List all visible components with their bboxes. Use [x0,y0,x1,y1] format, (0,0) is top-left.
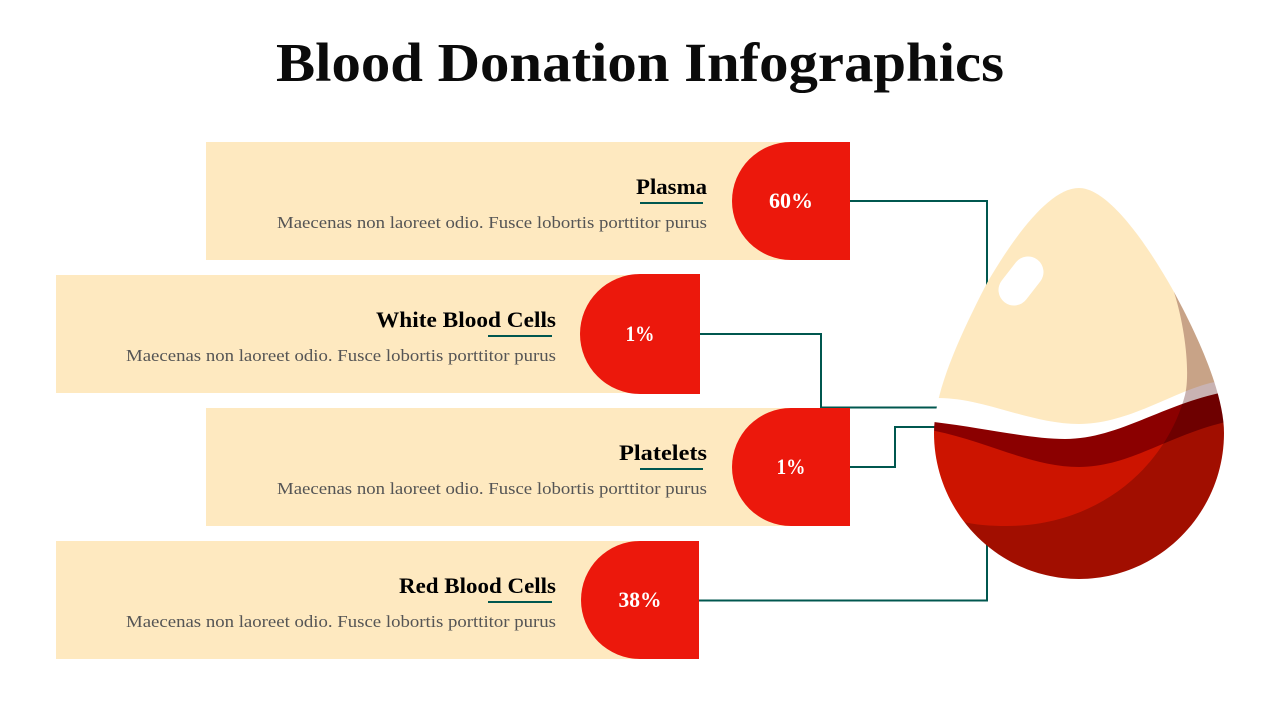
percentage: platelets: 1% [776,454,806,479]
description: platelets: Maecenas non laoreet odio. Fusce lobortis porttitor purus [277,479,707,498]
badge: platelets [732,408,850,526]
label: plasma: Plasma [636,174,707,199]
icon: blood drop [934,188,1224,579]
badge: white blood cells [580,274,700,394]
description: plasma: Maecenas non laoreet odio. Fusce lobortis porttitor purus [277,213,707,232]
panel: plasma [206,142,850,260]
badge: plasma [732,142,850,260]
label: white blood cells: White Blood Cells [376,307,556,332]
underline: plasma [640,202,703,204]
connector: plasma [850,201,987,290]
underline: red blood cells [488,601,552,603]
icon: drop highlight [1014,272,1028,290]
title: Blood Donation Infographics [276,32,1004,93]
label: platelets: Platelets [619,440,707,465]
panel: red blood cells [56,541,699,659]
badge: red blood cells [581,541,699,659]
connector: red blood cells [699,530,987,600]
percentage: plasma: 60% [769,188,813,213]
label: red blood cells: Red Blood Cells [399,573,556,598]
description: red blood cells: Maecenas non laoreet odio. Fusce lobortis porttitor purus [126,612,556,631]
description: white blood cells: Maecenas non laoreet odio. Fusce lobortis porttitor purus [126,346,556,365]
underline: white blood cells [488,335,552,337]
panel: platelets [206,408,850,526]
connector: white blood cells [700,334,940,408]
percentage: red blood cells: 38% [618,587,662,612]
percentage: white blood cells: 1% [626,321,654,346]
connector: platelets [850,427,940,467]
panel: white blood cells [56,274,700,394]
underline: platelets [640,468,703,470]
